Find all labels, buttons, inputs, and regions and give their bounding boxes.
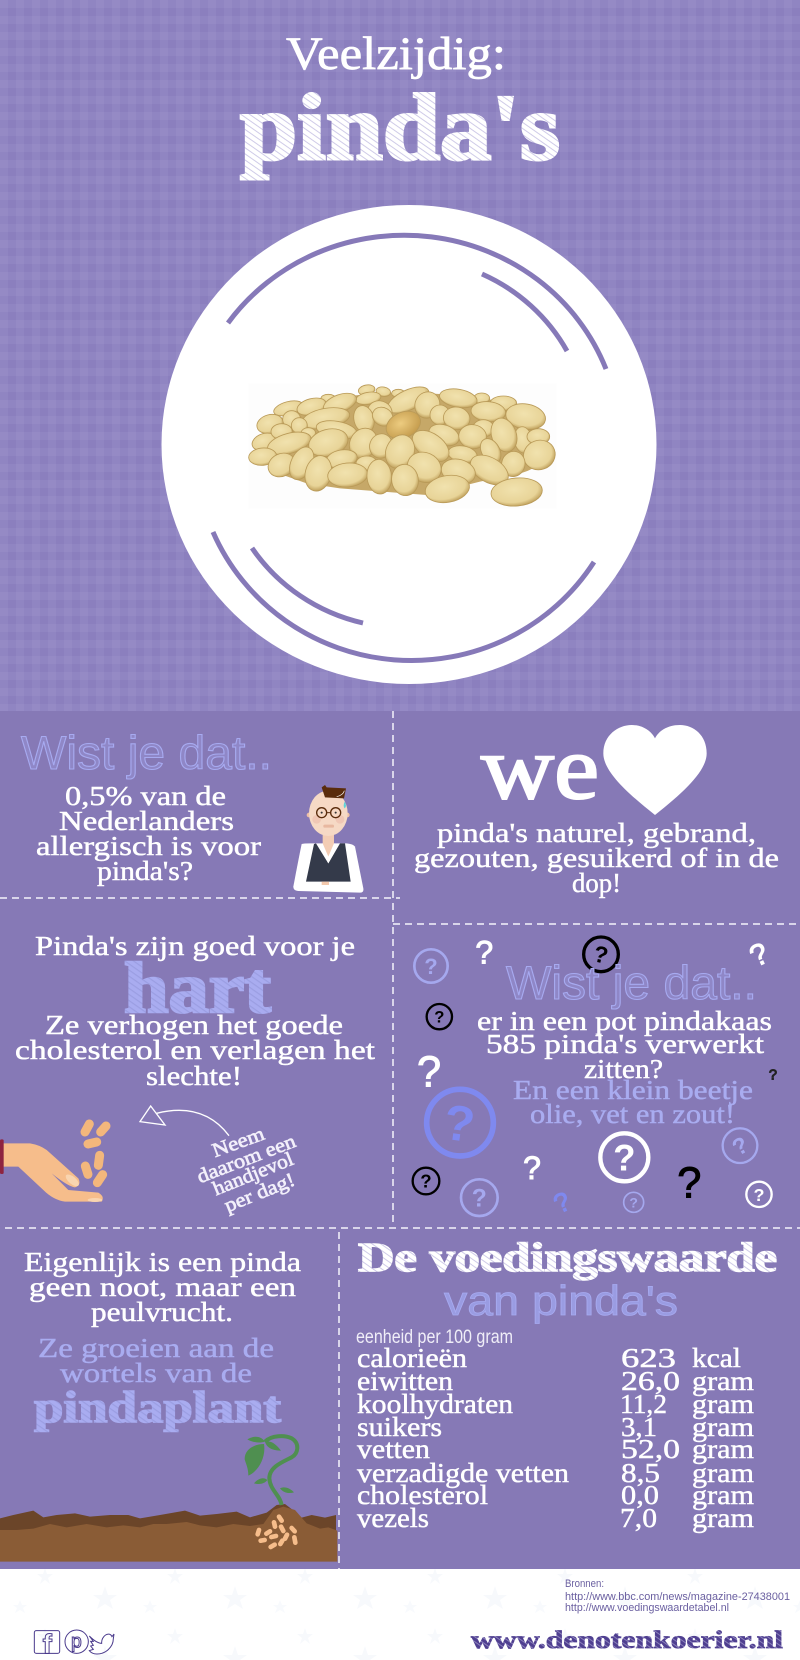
callout: handful a day: handjevol [210,1148,297,1200]
panel: purple content background [0,711,800,1569]
table: units: gram [692,1434,754,1464]
unit note: eenheid per 100 gram [356,1327,513,1348]
text block: 585 peanuts: 585 pinda's verwerkt [486,1029,765,1059]
arc: inner top right [482,274,567,351]
heading: Wist je dat: Wist je dat.. [506,956,757,1009]
panel: heart health [0,931,376,1217]
question mark decorations: ? [472,1186,487,1213]
heading: De voedingswaarde: De voedingswaarde [358,1234,777,1280]
text block: cholesterol: Ze verhogen het goede [45,1010,343,1040]
illustration: soil [0,1504,337,1562]
icon: heart [603,725,707,815]
panel: nutrition table [356,1234,777,1533]
text block: cholesterol: slechte! [146,1061,242,1091]
question mark decorations: ? [629,1194,638,1210]
arc: inner bottom [252,548,363,623]
text block: allergy: allergisch is voor [36,831,261,861]
table: values: 26,0 [621,1366,680,1396]
question mark decorations: ? [769,1067,777,1083]
table: nutrient names: vetten [357,1434,431,1464]
table: nutrient names: verzadigde vetten [357,1458,570,1488]
text block: allergy [36,781,261,886]
question mark decorations: ? [440,1094,478,1153]
question mark decorations: ? [420,1171,432,1192]
question mark decorations: ? [727,1131,753,1161]
panel: peanut butter fact [413,934,777,1219]
heading: pindaplant: pindaplant [34,1383,281,1432]
title line: pinda's: pinda's [240,76,560,180]
footer: sources: http://www.bbc.com/news/magazine-27438001 [565,1591,790,1603]
text block: 585 peanuts: zitten? [584,1054,663,1084]
arc: outer bottom [213,532,594,661]
panel: allergy fact [21,726,363,893]
table: nutrient names: vezels [357,1503,429,1533]
text: good for your: Pinda's zijn goed voor je [35,931,355,961]
question mark decorations: ? [549,1186,575,1219]
arc: outer top [228,235,606,369]
table: nutrient names: suikers [357,1412,442,1442]
white circle with peanut photo [162,205,656,684]
text block: varieties: dop! [572,868,621,898]
text block: oil, fat and salt: En een klein beetje [513,1075,753,1105]
icon: hand with peanuts [0,1124,106,1202]
icon: pinterest: p [71,1631,82,1652]
text block: not a nut: Eigenlijk is een pinda [24,1247,301,1277]
illustration: peanut plant [245,1436,297,1547]
question mark decorations: ? [424,954,438,979]
table: units: gram [692,1412,754,1442]
icon: twitter [89,1634,114,1654]
text block: varieties: gezouten, gesuikerd of in de [414,843,779,873]
text block: not a nut: peulvrucht. [91,1297,233,1327]
title line: Veelzijdig: Veelzijdig: [286,28,506,80]
white circle [162,205,656,684]
heading: hart: hart [124,948,271,1028]
icon: facebook: f [43,1628,53,1659]
table: nutrient names: cholesterol [357,1480,488,1510]
question mark decorations [413,934,777,1219]
table: values: 7,0 [620,1503,657,1533]
photo: pile of peanuts [248,381,559,508]
table: units: gram [692,1480,754,1510]
callout: handful a day: daarom een [194,1130,299,1188]
text block: allergy: Nederlanders [59,806,234,836]
table: units: gram [692,1503,754,1533]
table: values: 52,0 [621,1434,680,1464]
table: values [620,1343,680,1533]
table: nutrient names: eiwitten [357,1366,454,1396]
footer: sources [565,1578,790,1614]
table: units: kcal [692,1343,741,1373]
table: nutrient names: calorieën [357,1343,468,1373]
question mark decorations: ? [523,1150,541,1186]
footer: sources: Bronnen: [565,1578,604,1590]
text block: 585 peanuts [477,1006,772,1084]
table: units: gram [692,1366,754,1396]
text block: varieties [414,818,779,898]
table: units [692,1343,754,1533]
callout: handful a day: Neem [209,1123,268,1162]
question mark decorations: ? [753,1185,764,1205]
text block: not a nut: geen noot, maar een [29,1272,297,1302]
table: values: 11,2 [620,1389,667,1419]
table: values: 0,0 [621,1480,659,1510]
question mark decorations: ? [591,940,611,969]
table: units: gram [692,1458,754,1488]
heading: Wist je dat: Wist je dat.. [21,726,272,779]
question mark decorations: ? [434,1008,444,1027]
table: units: gram [692,1389,754,1419]
text block: cholesterol [15,1010,376,1091]
text block: grow on roots: Ze groeien aan de [38,1333,274,1363]
table: values: 623 [621,1343,676,1373]
table: values: 8,5 [621,1458,660,1488]
text block: grow on roots: wortels van de [60,1358,252,1388]
word: we: we [481,719,599,818]
footer: website: www.denotenkoerier.nl [471,1627,783,1654]
text block: varieties: pinda's naturel, gebrand, [437,818,756,848]
text block: allergy: 0,5% van de [65,781,226,811]
question mark decorations: ? [475,934,493,970]
title [240,28,560,180]
panel: white footer background [0,1569,800,1660]
text block: oil, fat and salt: olie, vet en zout! [530,1099,735,1129]
question mark decorations: ? [745,937,774,974]
text block: cholesterol: cholesterol en verlagen het [15,1035,376,1065]
text block: grow on roots [38,1333,274,1388]
text block: not a nut [24,1247,301,1327]
table: nutrient names [357,1343,570,1533]
table: values: 3,1 [621,1412,657,1442]
heading: van pinda's: van pinda's [444,1277,678,1324]
arrow: to hand [140,1106,229,1136]
callout: handful a day: per dag! [221,1169,298,1217]
question mark decorations: ? [417,1049,441,1097]
question mark decorations: ? [677,1159,701,1207]
icon: worried man [293,785,363,893]
text block: allergy: pinda's? [97,856,193,886]
text block: oil, fat and salt [513,1075,753,1129]
footer: social icons [34,1628,114,1659]
panel: plaid header background [0,0,800,711]
panel: legume fact [0,1247,337,1562]
panel: we love peanuts [414,719,779,898]
callout: handful a day [194,1123,299,1217]
text block: 585 peanuts: er in een pot pindakaas [477,1006,772,1036]
question mark decorations: ? [613,1138,636,1179]
table: nutrient names: koolhydraten [357,1389,514,1419]
footer: sources: http://www.voedingswaardetabel.nl [565,1602,729,1614]
